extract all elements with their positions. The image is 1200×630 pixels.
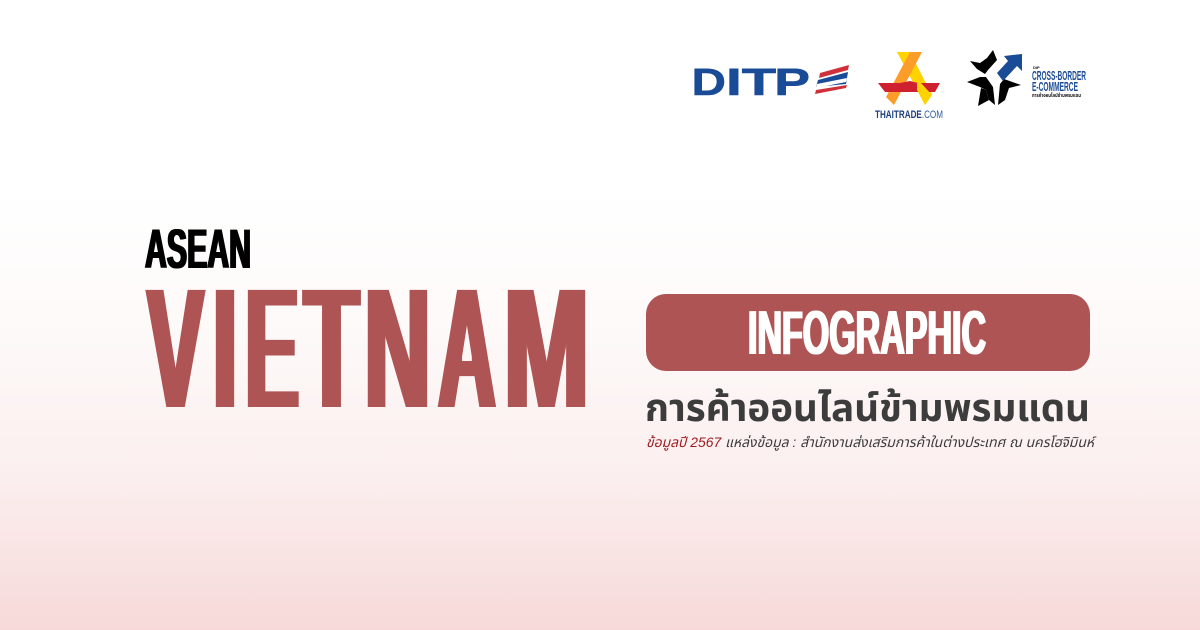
icon: blue arrow bbox=[997, 54, 1022, 81]
heading: VIETNAM: A bbox=[438, 251, 496, 447]
logo: Cross-Border E-Commerce: E-COMMERCE bbox=[1032, 79, 1078, 94]
logo: Cross-Border E-Commerce bbox=[967, 50, 1086, 106]
heading: VIETNAM: T bbox=[304, 251, 359, 447]
badge: INFOGRAPHIC: INFOGRAPHIC bbox=[748, 299, 986, 368]
source note: ข้อมูลปี 2567 แหล่งข้อมูล : สำนักงานส่งเสริมการค้าในต่างประเทศ ณ นครโฮจิมินห์ bbox=[646, 434, 1097, 451]
badge: INFOGRAPHIC bbox=[646, 294, 1090, 371]
logo: DITP bbox=[692, 62, 849, 104]
heading: VIETNAM: V bbox=[147, 251, 204, 447]
logo: DITP: I bbox=[726, 62, 742, 104]
heading: VIETNAM: M bbox=[504, 251, 589, 447]
heading: ASEAN: ASEAN bbox=[145, 217, 251, 280]
subtitle: Thai: การค้าออนไลน์ข้ามพรมแดน bbox=[645, 388, 1090, 430]
heading: VIETNAM: N bbox=[365, 251, 430, 447]
icon: star shards bbox=[967, 50, 1021, 106]
logo: DITP: D bbox=[692, 62, 726, 104]
logo: DITP: P bbox=[774, 62, 810, 104]
heading: VIETNAM: I bbox=[213, 251, 237, 447]
logo: DITP: T bbox=[742, 62, 776, 104]
heading: VIETNAM: E bbox=[246, 251, 299, 447]
logo: Cross-Border E-Commerce: การค้าออนไลน์ข้ามพรมแดน bbox=[1032, 92, 1081, 99]
logo: Cross-Border E-Commerce: CROSS-BORDER bbox=[1032, 68, 1086, 83]
logo: Cross-Border E-Commerce: DIP bbox=[1033, 65, 1040, 70]
logo: Thaitrade bbox=[875, 52, 943, 121]
logo: Thaitrade: THAITRADE.COM bbox=[875, 109, 943, 121]
